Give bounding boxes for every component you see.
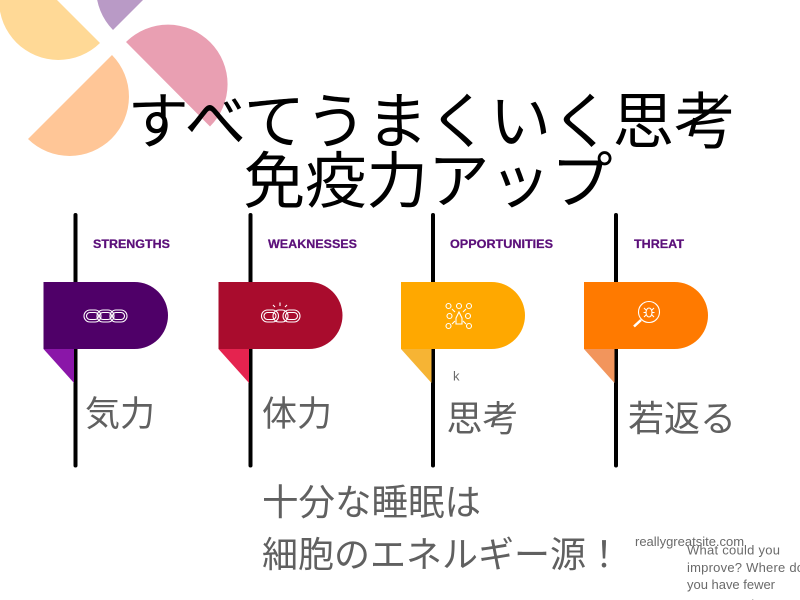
heading: threat: THREAT xyxy=(634,237,685,251)
label: 気力: 気力 xyxy=(85,395,155,434)
tab xyxy=(218,282,342,349)
tab xyxy=(584,282,708,349)
tab xyxy=(44,282,168,349)
icon: magnifier with bug xyxy=(634,302,660,326)
petal: pink xyxy=(126,25,228,127)
body text: What could you xyxy=(687,542,780,558)
message line 2: 細胞のエネルギー源！ xyxy=(262,534,622,575)
heading: strengths: STRENGTHS xyxy=(93,237,170,251)
tab fold xyxy=(584,349,614,383)
vertical line xyxy=(614,215,618,466)
vertical line xyxy=(248,215,252,466)
vertical line xyxy=(431,215,435,466)
label: 体力: 体力 xyxy=(262,395,332,434)
body text: you have fewer xyxy=(687,577,776,592)
label: 思考: 思考 xyxy=(446,398,519,439)
body text xyxy=(687,542,800,600)
message line 1: 十分な睡眠は xyxy=(262,482,481,523)
petal: yellow xyxy=(0,0,100,60)
message xyxy=(262,482,622,575)
petal: orange xyxy=(28,55,129,156)
tab fold xyxy=(218,349,249,383)
icon: breaking chain xyxy=(262,302,300,322)
tab xyxy=(401,282,525,349)
icon: ideas network xyxy=(446,304,472,328)
column: weaknesses xyxy=(218,215,357,466)
heading: opportunities: OPPORTUNITIES xyxy=(450,237,553,251)
column: threat xyxy=(584,215,736,466)
tab fold xyxy=(44,349,74,383)
title: すべてうまくいく思考 xyxy=(127,88,736,157)
column: strengths xyxy=(44,215,170,466)
heading: weaknesses: WEAKNESSES xyxy=(268,237,357,251)
petal: purple xyxy=(96,0,197,30)
icon: chain xyxy=(84,310,127,322)
decorative pinwheel xyxy=(0,0,228,156)
label: 若返る: 若返る xyxy=(628,398,736,439)
small letter k: k xyxy=(453,368,460,384)
tab fold xyxy=(401,349,432,383)
subtitle: 免疫力アップ xyxy=(243,148,613,216)
column: opportunities xyxy=(401,215,553,466)
vertical line xyxy=(74,215,78,466)
website: reallygreatsite.com xyxy=(635,534,744,549)
